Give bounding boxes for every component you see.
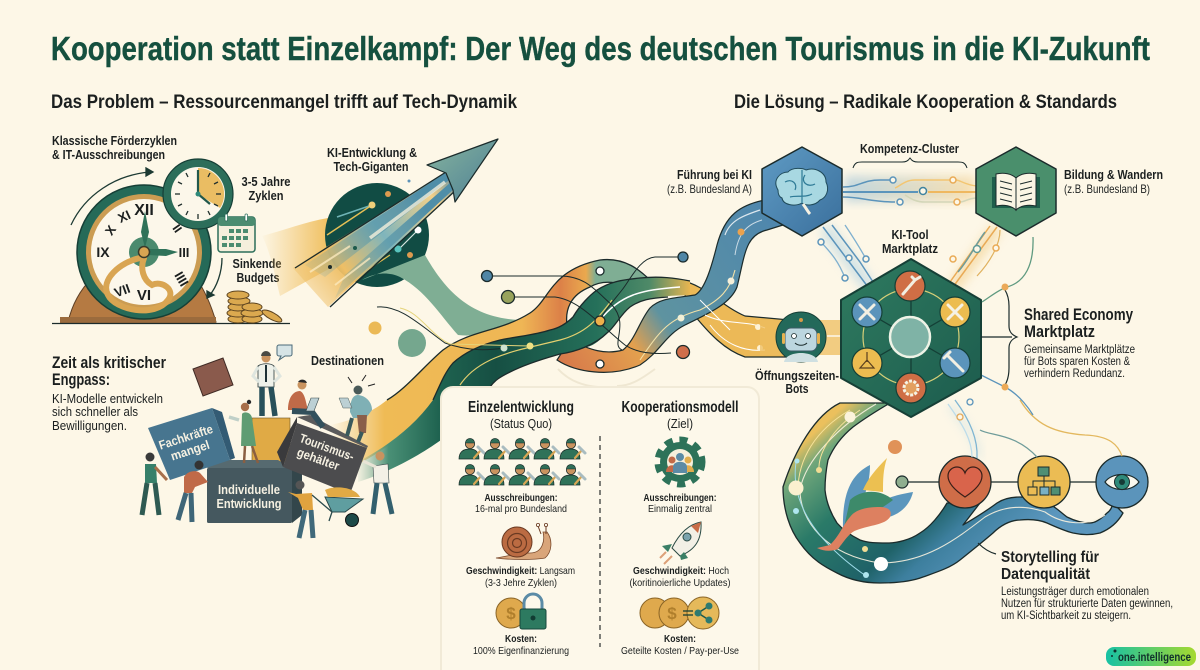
- node: tools yellow: [940, 297, 970, 327]
- label: Förderzyklen: Klassische Förderzyklen: [52, 133, 177, 148]
- text: Shared Economy: Marktplatz: [1024, 323, 1095, 341]
- text: Geschwindigkeit: [630, 565, 730, 589]
- text: Zeit als kritischer Engpass: [52, 353, 166, 433]
- block: Individuelle Entwicklung: Individuelle: [218, 483, 280, 497]
- label: Budgets: Sinkende: [232, 256, 282, 271]
- text: Zeit als kritischer Engpass: Engpass:: [52, 370, 110, 389]
- circuits: between hexagons: [843, 176, 977, 205]
- text: Shared Economy: Shared Economy: [1024, 306, 1134, 324]
- label: Führung bei KI: (z.B. Bundesland A): [667, 182, 752, 196]
- text: Shared Economy: für Bots sparen Kosten &: [1024, 356, 1130, 368]
- icon: leaf logo: [817, 458, 913, 551]
- label: KI-Tool Marktplatz: [882, 227, 938, 256]
- label: Bildung: [1064, 167, 1163, 196]
- column: Einzelentwicklung: Einzelentwicklung: [468, 399, 574, 416]
- text: Storytelling: Datenqualität: [1001, 566, 1091, 583]
- label: Bildung: (z.B. Bundesland B): [1064, 182, 1150, 196]
- label: Kompetenz-Cluster: [853, 141, 967, 168]
- heading: solution: Die Lösung – Radikale Kooperation & Standards: [734, 92, 1117, 113]
- block: Tourismusgehälter: [277, 415, 368, 494]
- text: Ausschreibungen: Einmalig zentral: [648, 503, 712, 515]
- planet: tech giants: [325, 180, 429, 287]
- icon: large clock: VI: [137, 287, 151, 304]
- wheelbarrow: [312, 487, 363, 526]
- block: Individuelle Entwicklung: Entwicklung: [216, 497, 282, 511]
- text: Ausschreibungen: [644, 492, 716, 515]
- icon: shared coins: $: [667, 604, 677, 623]
- icon: gear with people: [658, 440, 702, 484]
- panel: comparison: [441, 387, 759, 670]
- node: gear orange: [896, 373, 926, 403]
- label: KI-Entwicklung: Tech-Giganten: [334, 159, 409, 174]
- icon: large clock: [52, 185, 290, 324]
- block: Fachkräftemangel: [148, 408, 235, 480]
- text: Storytelling: Leistungsträger durch emotionalen: [1001, 586, 1149, 598]
- falling block: [193, 358, 233, 396]
- label: Destinationen: Destinationen: [311, 353, 384, 368]
- text: Geschwindigkeit: (koritinoierliche Updates): [630, 577, 730, 589]
- icon: rocket: [660, 522, 701, 564]
- text: Geschwindigkeit: (3-3 Jehre Zyklen): [485, 577, 557, 589]
- person: orange shirt: [178, 460, 208, 522]
- person: yellow shirt: [288, 480, 313, 538]
- green tail: [362, 255, 530, 336]
- yellow cone behind arrow: [262, 218, 345, 296]
- icon: large clock: XII: [134, 202, 154, 219]
- label: Budgets: Budgets: [236, 270, 280, 285]
- label: KI-Entwicklung: [327, 145, 417, 174]
- text: Ausschreibungen: [475, 492, 567, 515]
- node: tool yellow: [852, 348, 882, 378]
- icon: large clock: III: [179, 245, 189, 260]
- text: Shared Economy: verhindern Redundanz.: [1024, 368, 1125, 380]
- column: Kooperationsmodell: (Ziel): [667, 416, 693, 431]
- icon: storytelling dots and line: [888, 440, 1100, 488]
- text: Storytelling: um KI-Sichtbarkeit zu steigern.: [1001, 610, 1131, 622]
- icon: heart: [939, 456, 991, 508]
- person: destination: [339, 375, 375, 442]
- label: Förderzyklen: [52, 133, 177, 162]
- text: Kosten: Kosten:: [505, 633, 537, 645]
- icon: coin and lock: [496, 594, 546, 629]
- text: Zeit als kritischer Engpass: sich schneller als: [52, 404, 138, 419]
- knot nodes: [482, 228, 763, 368]
- label: Führung bei KI: [667, 167, 752, 196]
- text: Zeit als kritischer Engpass: Zeit als kritischer: [52, 353, 166, 372]
- icon: snail: [496, 523, 551, 560]
- label: Bildung: Bildung & Wandern: [1064, 167, 1163, 182]
- icon: shared coins: [640, 597, 719, 629]
- person: manager: [253, 345, 292, 416]
- node: wrench blue: [940, 348, 970, 378]
- icon: small clock: [163, 159, 233, 229]
- icon: large clock: VII: [112, 281, 132, 300]
- hexagon: marketplace hub: [841, 259, 981, 417]
- text: Kosten: Kosten:: [664, 633, 696, 645]
- block: Fachkräftemangel: Fachkräfte: [157, 422, 215, 453]
- heading: problem: Das Problem – Ressourcenmangel trifft auf Tech-Dynamik: [51, 92, 517, 113]
- decorative dots: [368, 322, 426, 357]
- connector: lines to storytelling: [948, 375, 1122, 458]
- circuits: blue hex to hub: [818, 225, 875, 288]
- label: bots: Öffnungszeiten-: [755, 368, 839, 383]
- text: Shared Economy: Gemeinsame Marktplätze: [1024, 344, 1135, 356]
- node: wrench orange: [895, 271, 925, 301]
- icon: large clock: II: [170, 222, 185, 235]
- label: KI-Tool Marktplatz: KI-Tool: [892, 227, 928, 242]
- text: Ausschreibungen: 16-mal pro Bundesland: [475, 503, 567, 515]
- label: KI-Tool Marktplatz: Marktplatz: [882, 241, 938, 256]
- person: laptop: [288, 380, 323, 427]
- icon: coins: [227, 291, 283, 324]
- text: Geschwindigkeit: [466, 565, 575, 589]
- bot band: [760, 320, 845, 355]
- text: Kosten: Geteilte Kosten / Pay-per-Use: [621, 645, 739, 657]
- icon: robot: [776, 312, 855, 362]
- ribbon details and thin lines: [377, 210, 765, 385]
- label: Förderzyklen: & IT-Ausschreibungen: [52, 147, 165, 162]
- text: Shared Economy: [1024, 306, 1135, 380]
- yellow pedestal: [252, 418, 290, 462]
- block: Fachkräftemangel: mangel: [169, 438, 211, 463]
- soft shadow above panel: [558, 369, 655, 387]
- hexagon: KI leadership: [762, 147, 842, 236]
- text: Storytelling: [978, 543, 1173, 622]
- icon: ten workers: [459, 438, 585, 485]
- label: KI-Entwicklung: KI-Entwicklung &: [327, 145, 417, 160]
- icon: coin and lock: $: [506, 604, 516, 623]
- icon: large clock: XI: [115, 207, 133, 226]
- icon: brain: [776, 168, 828, 214]
- icon: hierarchy: [1018, 456, 1070, 508]
- ribbon: dark green: [358, 277, 690, 482]
- arrow: AI development: [293, 139, 498, 307]
- label: Zyklen: Zyklen: [248, 188, 284, 203]
- text: Geschwindigkeit: Geschwindigkeit: Hoch: [633, 565, 729, 577]
- label: Zyklen: [242, 174, 290, 203]
- text: Kosten: 100% Eigenfinanzierung: [473, 645, 569, 657]
- icon: calendar: [218, 214, 255, 252]
- hexagon: Bildung: [976, 147, 1056, 236]
- logo: one.intelligence: [1106, 647, 1196, 666]
- person: green dress: [229, 400, 258, 463]
- label: Budgets: [232, 256, 282, 285]
- text: Zeit als kritischer Engpass: Bewilligungen.: [52, 418, 127, 433]
- icon: book: [992, 173, 1040, 210]
- text: Kosten: [473, 633, 569, 657]
- ribbon: yellow end toward bot: [680, 280, 790, 357]
- block: Individuelle Entwicklung: [207, 460, 302, 523]
- bracket: shared economy: [981, 237, 1033, 390]
- column: Kooperationsmodell: Kooperationsmodell: [622, 399, 738, 416]
- icon: cycle arrows: [71, 168, 222, 298]
- ribbon: yellow-orange loop: [330, 260, 652, 470]
- icon: large clock: IX: [96, 244, 110, 260]
- icon: eye: [1096, 456, 1148, 508]
- illustration: blocks and people: [142, 345, 392, 538]
- column: Einzelentwicklung: [459, 399, 585, 657]
- icon: large clock: X: [102, 222, 119, 238]
- block: Tourismusgehälter: Tourismus-: [298, 431, 356, 464]
- text: Ausschreibungen: Ausschreibungen:: [484, 492, 558, 504]
- icon: large clock: IIII: [171, 269, 192, 289]
- text: Storytelling: Storytelling für: [1001, 549, 1099, 566]
- column: Einzelentwicklung: (Status Quo): [490, 416, 552, 431]
- label: Führung bei KI: Führung bei KI: [677, 167, 752, 182]
- label: bots: Bots: [786, 381, 808, 396]
- column divider: [599, 436, 601, 647]
- block: Tourismusgehälter: gehälter: [295, 445, 341, 473]
- text: Zeit als kritischer Engpass: KI-Modelle entwickeln: [52, 391, 163, 406]
- ribbon: orange to blue: [557, 200, 783, 372]
- node: tools blue: [852, 297, 882, 327]
- right ribbon: [783, 403, 1123, 583]
- label: Kompetenz-Cluster: Kompetenz-Cluster: [860, 141, 959, 156]
- column: Kooperationsmodell: [621, 399, 739, 657]
- text: Ausschreibungen: Ausschreibungen:: [644, 492, 716, 504]
- label: bots: [755, 368, 839, 396]
- person: white shirt: [363, 452, 392, 514]
- circuits: green hex to hub: [950, 226, 1000, 288]
- label: Zyklen: 3-5 Jahre: [242, 174, 290, 189]
- text: Geschwindigkeit: Geschwindigkeit: Langsam: [466, 565, 575, 577]
- text: Kosten: [621, 633, 739, 657]
- person: pushing left: [142, 452, 167, 515]
